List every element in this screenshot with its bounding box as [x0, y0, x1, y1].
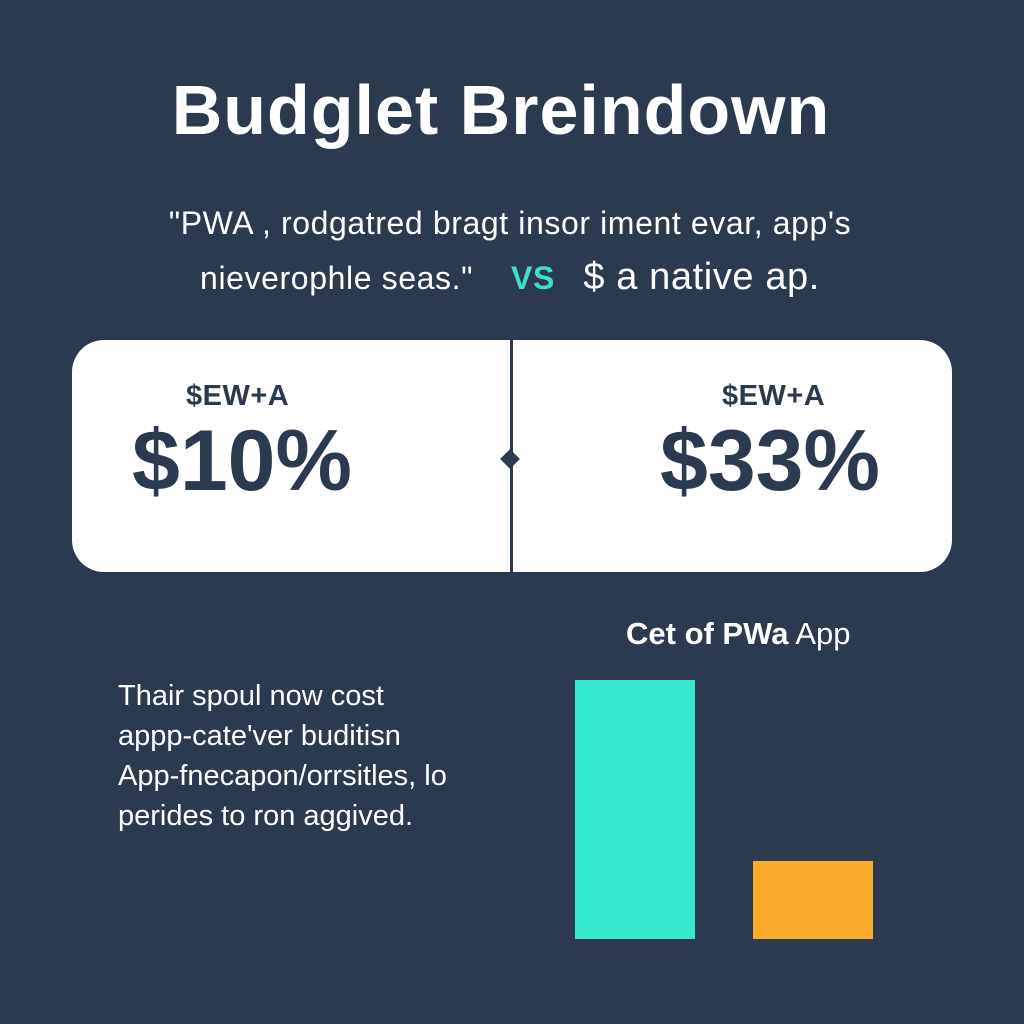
text block: appp-cate'ver buditisn	[118, 720, 401, 752]
subtitle: "PWA , rodgatred bragt insor iment evar, app's	[169, 205, 851, 241]
text block	[118, 680, 447, 832]
title: Budglet Breindown	[172, 71, 830, 149]
value: left: $10%	[132, 413, 352, 509]
panel: comparison card	[72, 340, 952, 572]
text block: App-fnecapon/orrsitles, lo	[118, 760, 447, 792]
label: left: $EW+A	[186, 380, 289, 412]
value: right: $33%	[660, 413, 880, 509]
divider with diamond	[510, 338, 513, 574]
bar chart	[575, 680, 873, 939]
bar: PWA	[575, 680, 695, 939]
text block: perides to ron aggived.	[118, 800, 413, 832]
chart title: Cet of PWa App	[626, 616, 851, 651]
subtitle: nieverophle seas." VS $ a native ap.	[200, 256, 820, 298]
bar: native	[753, 861, 873, 939]
text block: Thair spoul now cost	[118, 680, 384, 712]
label: right: $EW+A	[722, 380, 825, 412]
subtitle	[169, 205, 851, 298]
